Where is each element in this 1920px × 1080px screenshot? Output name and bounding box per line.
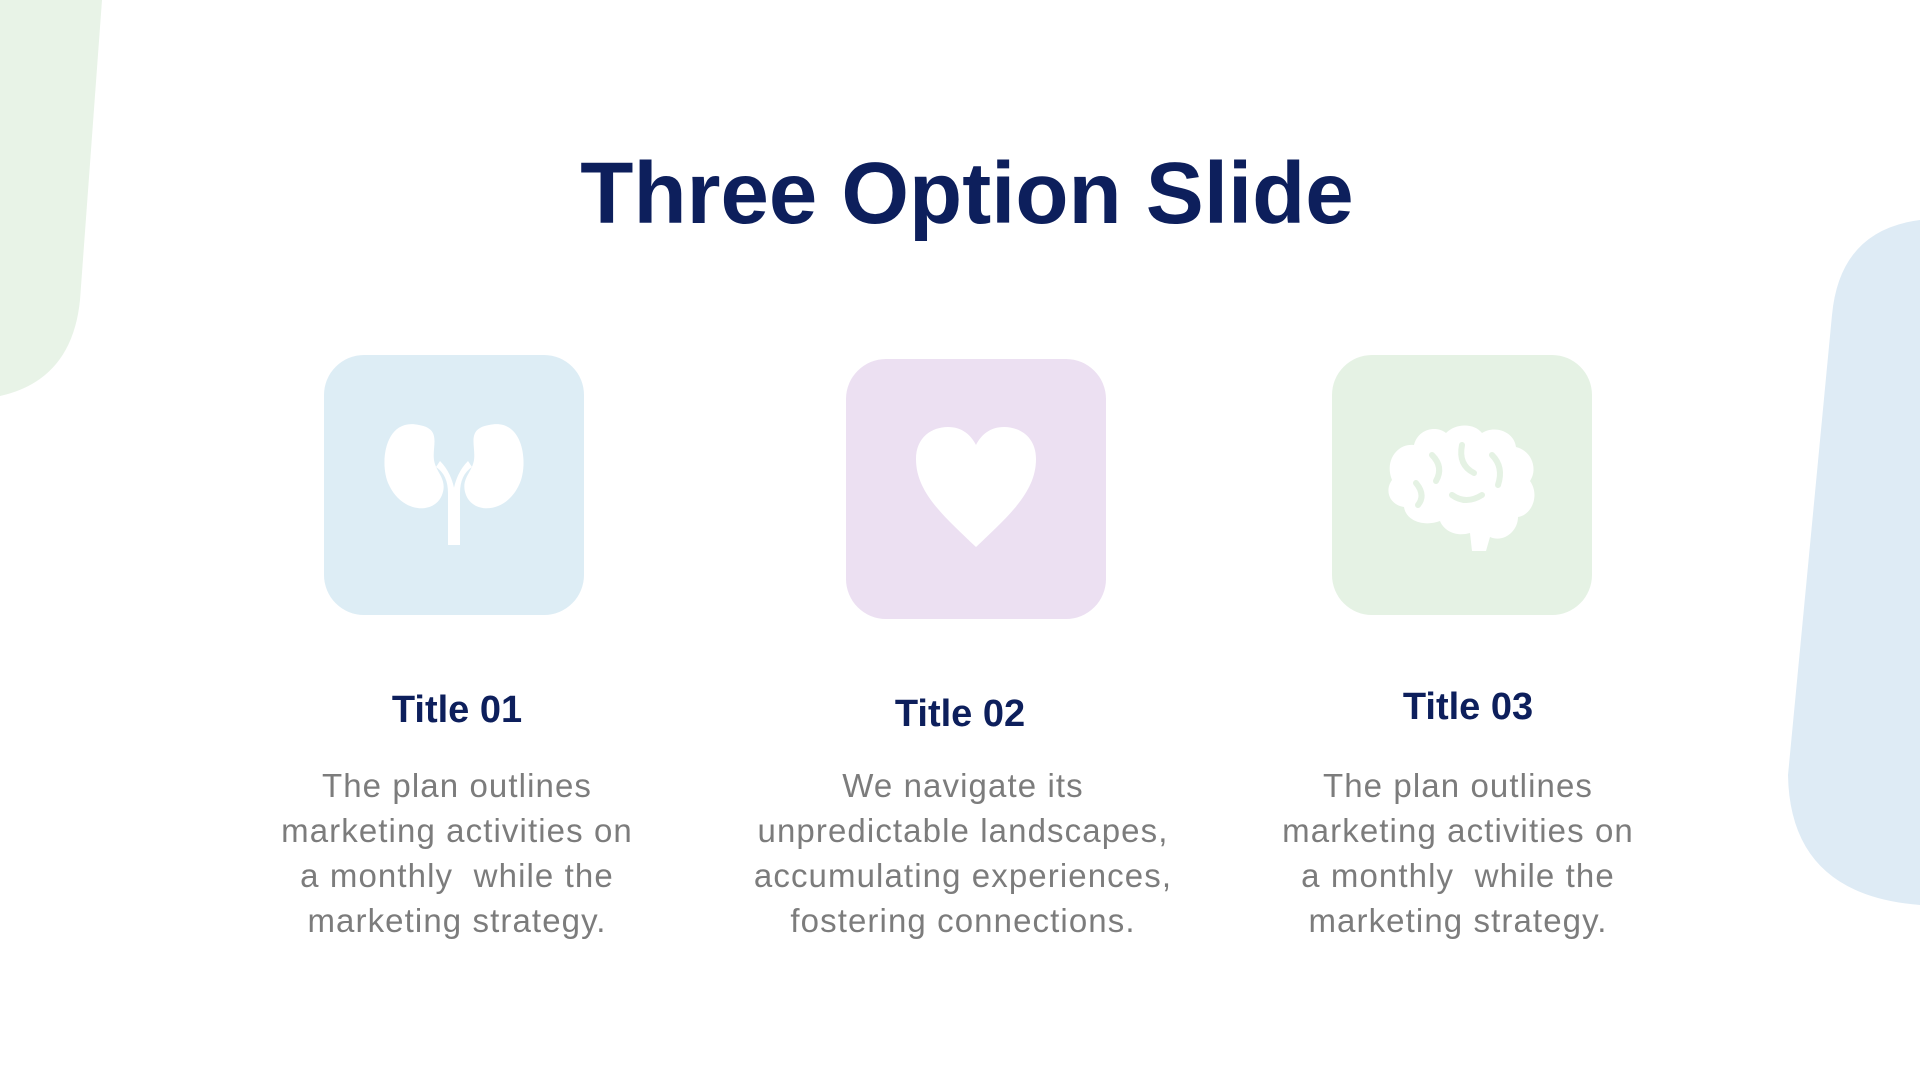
text block 1: The plan outlines bbox=[322, 767, 592, 804]
text block 3 bbox=[1282, 767, 1634, 939]
text block 3: marketing activities on bbox=[1282, 812, 1634, 849]
text block 1 bbox=[281, 767, 633, 939]
text block 2: We navigate its bbox=[842, 767, 1084, 804]
icon box: heart bbox=[846, 359, 1106, 619]
decorative shape: top-left green blob bbox=[0, 0, 102, 396]
icon box: brain bbox=[1332, 355, 1592, 615]
text block 2 bbox=[754, 767, 1172, 939]
text block 3: marketing strategy. bbox=[1308, 902, 1608, 939]
heading: Title 01: Title 01 bbox=[392, 689, 522, 731]
title: Three Option Slide bbox=[580, 145, 1354, 242]
text block 3: The plan outlines bbox=[1323, 767, 1593, 804]
heading: Title 02: Title 02 bbox=[895, 693, 1025, 735]
text block 1: marketing activities on bbox=[281, 812, 633, 849]
panel: option 3 bbox=[1282, 355, 1634, 939]
panel: option 2 bbox=[754, 359, 1172, 939]
text block 2: fostering connections. bbox=[790, 902, 1136, 939]
panel: option 1 bbox=[281, 355, 633, 939]
text block 3: a monthly while the bbox=[1301, 857, 1615, 894]
decorative shape: right blue blob bbox=[1788, 220, 1920, 905]
text block 2: unpredictable landscapes, bbox=[758, 812, 1168, 849]
text block 2: accumulating experiences, bbox=[754, 857, 1172, 894]
heading: Title 03: Title 03 bbox=[1403, 686, 1533, 728]
text block 1: a monthly while the bbox=[300, 857, 614, 894]
text block 1: marketing strategy. bbox=[307, 902, 607, 939]
icon box: kidneys bbox=[324, 355, 584, 615]
